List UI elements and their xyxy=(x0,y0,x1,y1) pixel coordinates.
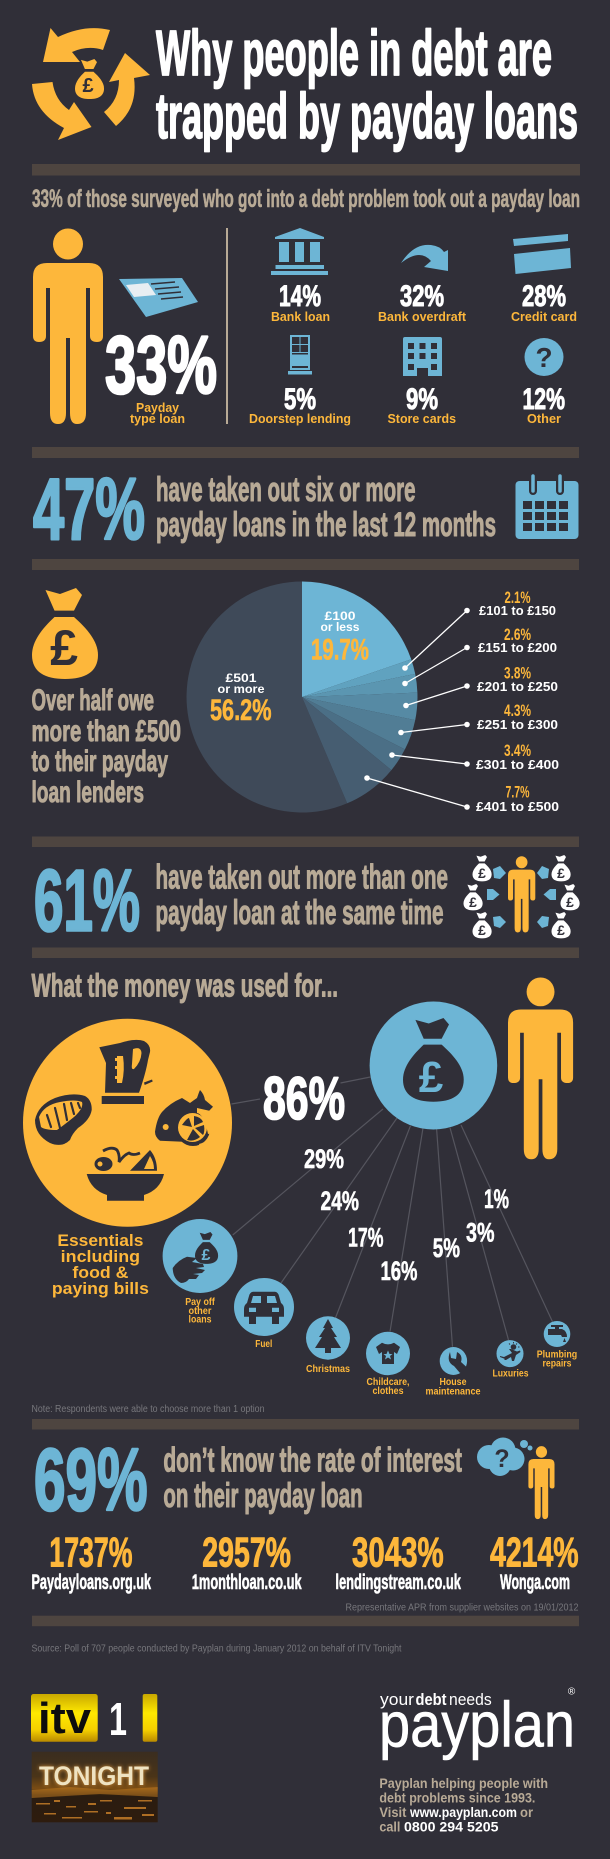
icon: question mark xyxy=(524,338,564,376)
text: payplan contact xyxy=(379,1775,548,1835)
icon: person surrounded by money bags: £ xyxy=(557,922,565,938)
text: payplan contact: debt problems since 1993. xyxy=(379,1790,535,1806)
labels: amount bands: 3.8% xyxy=(504,664,531,682)
item: pay off other loans: £ xyxy=(202,1247,211,1264)
stat: other: Other xyxy=(527,411,561,426)
leader lines xyxy=(364,608,470,810)
logo: Tonight xyxy=(32,1752,158,1822)
label: £100 or less: £100 xyxy=(324,609,356,623)
interest rates xyxy=(32,1529,579,1594)
logo: Tonight: TONIGHT xyxy=(39,1761,149,1791)
header xyxy=(32,17,578,152)
label: payday type loan: type loan xyxy=(130,412,185,426)
stat: other: 12% xyxy=(522,383,565,416)
stat: bank overdraft: 32% xyxy=(400,280,444,313)
text: over half owe: more than £500 xyxy=(32,715,181,748)
icon: person surrounded by money bags: £ xyxy=(566,894,574,910)
stat: bank loan: 14% xyxy=(279,280,321,313)
stat: 86%: 86% xyxy=(263,1065,345,1132)
stat: 33%: 33% xyxy=(105,320,217,411)
icon: person surrounded by money bags: £ xyxy=(469,894,477,910)
panel: payday type loan xyxy=(33,228,217,426)
icon: person surrounded by money bags xyxy=(464,855,580,938)
labels: amount bands: £251 to £300 xyxy=(477,718,558,732)
item: pay off other loans: Pay off xyxy=(185,1297,215,1308)
note: representative APR: Representative APR from supplier websites on 19/01/2012 xyxy=(346,1602,579,1614)
item: christmas xyxy=(306,1316,350,1375)
stat: bank loan xyxy=(271,280,330,324)
text: payplan contact: www.payplan.com xyxy=(409,1804,517,1820)
stat: doorstep lending: Doorstep lending xyxy=(249,411,351,426)
rate: paydayloans xyxy=(32,1529,151,1594)
item: christmas: Christmas xyxy=(306,1364,350,1375)
rate: lendingstream xyxy=(335,1529,461,1594)
panel: other debt types xyxy=(249,228,577,426)
logo: Payplan: payplan xyxy=(379,1689,575,1761)
text: essentials: paying bills xyxy=(52,1279,149,1298)
panel: 69% xyxy=(34,1430,555,1529)
text: payplan contact: Visit xyxy=(379,1804,407,1820)
icon: money bag: £ xyxy=(50,620,78,676)
logo: Tonight: TONIGHT xyxy=(39,1761,149,1791)
item: house maintenance: House xyxy=(440,1377,467,1388)
item: childcare, clothes: Childcare, xyxy=(366,1377,410,1388)
icon: store building xyxy=(403,337,442,376)
source: Source: Poll of 707 people conducted by Payplan during January 2012 on behalf of ITV Tonight xyxy=(32,1643,402,1655)
icon: person xyxy=(508,977,573,1159)
labels: amount bands: 2.6% xyxy=(504,626,531,644)
stat: credit card: Credit card xyxy=(511,309,577,324)
icon: money bag xyxy=(32,588,98,679)
money bag circle xyxy=(370,1002,497,1130)
icon: person xyxy=(33,228,103,424)
stat: 69%: 69% xyxy=(34,1430,148,1529)
text: essentials: food & xyxy=(72,1263,128,1282)
rate: 1monthloan xyxy=(192,1529,302,1594)
item: pay off other loans: loans xyxy=(188,1315,212,1326)
label: £501 or more xyxy=(210,671,272,727)
text: payplan contact: or xyxy=(520,1804,534,1820)
stat: store cards: Store cards xyxy=(388,411,456,426)
icon: person surrounded by money bags: £ xyxy=(557,865,565,881)
labels: amount bands xyxy=(476,589,559,814)
icon: steak xyxy=(35,1094,92,1145)
stat: bank overdraft xyxy=(378,280,467,324)
text: essentials xyxy=(52,1231,149,1298)
item: luxuries: Luxuries xyxy=(492,1369,529,1380)
percentages xyxy=(304,1144,509,1286)
item: fuel xyxy=(234,1278,294,1350)
item: plumbing repairs: repairs xyxy=(542,1359,572,1370)
text: rate of interest: on their payday loan xyxy=(163,1477,363,1515)
icon: salad bowl xyxy=(87,1148,164,1201)
panel: money use xyxy=(23,977,577,1397)
icon: confused person: ? xyxy=(494,1445,510,1473)
label: payday type loan xyxy=(130,401,185,426)
text: over half owe: to their payday xyxy=(32,745,168,778)
panel: 61% xyxy=(34,852,580,950)
labels: amount bands: £201 to £250 xyxy=(477,680,558,694)
icon: overdraft arrow xyxy=(401,245,448,271)
stat: bank overdraft: Bank overdraft xyxy=(378,309,467,324)
icon: confused person xyxy=(477,1438,555,1519)
stat: 47%: 47% xyxy=(33,461,145,558)
item: fuel: Fuel xyxy=(255,1339,272,1350)
text: six or more payday loans: have taken out six or more xyxy=(156,471,416,509)
icon: payday loan card xyxy=(119,278,198,317)
percentages: 29% xyxy=(304,1144,344,1174)
note: Note: Respondents were able to choose more than 1 option xyxy=(32,1404,264,1415)
labels: amount bands: 4.3% xyxy=(504,702,531,720)
icon: fish with lemon xyxy=(155,1090,217,1147)
panel: 47% xyxy=(33,461,578,558)
item: house maintenance: maintenance xyxy=(426,1386,481,1397)
item: pay off other loans: other xyxy=(188,1306,212,1317)
stat: credit card: 28% xyxy=(522,280,566,313)
labels: amount bands: 2.1% xyxy=(504,589,531,607)
item: childcare, clothes xyxy=(366,1332,410,1397)
logo: ITV1 xyxy=(31,1693,157,1745)
logo: Payplan: your xyxy=(380,1690,414,1709)
logo: ITV1: itv xyxy=(38,1694,92,1743)
rate: paydayloans: 1737% xyxy=(49,1529,132,1576)
item: plumbing repairs: Plumbing xyxy=(537,1350,577,1361)
icon: person surrounded by money bags: £ xyxy=(478,922,486,938)
item: plumbing repairs xyxy=(537,1321,577,1370)
panel: amounts owed xyxy=(32,582,559,814)
labels: amount bands: £401 to £500 xyxy=(476,800,559,814)
pie chart xyxy=(187,582,559,814)
percentages: 17% xyxy=(348,1222,384,1252)
rate: lendingstream: lendingstream.co.uk xyxy=(335,1571,461,1594)
text: essentials: including xyxy=(61,1247,140,1266)
connector lines xyxy=(232,1077,552,1347)
labels: amount bands: 7.7% xyxy=(506,784,530,802)
labels: amount bands: £151 to £200 xyxy=(478,641,557,655)
text: essentials: Essentials xyxy=(57,1231,143,1250)
percentages: 16% xyxy=(380,1256,418,1286)
rate: 1monthloan: 1monthloan.co.uk xyxy=(192,1571,302,1594)
labels: amount bands: £301 to £400 xyxy=(476,758,559,772)
icon: bank xyxy=(271,228,328,275)
labels: amount bands: £101 to £150 xyxy=(479,604,556,618)
money bag circle: £ xyxy=(419,1053,444,1102)
item: pay off other loans xyxy=(163,1219,237,1326)
percentages: 24% xyxy=(320,1186,359,1216)
essentials circle xyxy=(23,1019,232,1298)
text: payplan contact: 0800 294 5205 xyxy=(404,1819,499,1835)
label: £501 or more: 56.2% xyxy=(210,694,272,727)
logo: Payplan: ® xyxy=(568,1686,576,1698)
text: over half owe xyxy=(32,684,181,809)
logo: Payplan: needs xyxy=(449,1690,492,1709)
text: rate of interest xyxy=(163,1442,462,1515)
text: six or more payday loans xyxy=(156,471,496,544)
title xyxy=(156,17,578,152)
heading: what the money was used for: What the money was used for... xyxy=(32,968,338,1004)
text: over half owe: loan lenders xyxy=(32,776,144,809)
text: more than one loan xyxy=(156,858,448,932)
icon: kettle xyxy=(99,1040,153,1104)
label: £100 or less xyxy=(311,609,369,666)
percentages: 1% xyxy=(484,1184,509,1214)
item: childcare, clothes: clothes xyxy=(372,1386,404,1397)
percentages: 3% xyxy=(466,1218,494,1248)
rate: 1monthloan: 2957% xyxy=(202,1529,291,1576)
item: luxuries xyxy=(492,1340,529,1380)
text: payplan contact: Payplan helping people with xyxy=(379,1775,548,1791)
logo: ITV1: 1 xyxy=(109,1693,127,1745)
stat: doorstep lending xyxy=(249,383,351,426)
rate: lendingstream: 3043% xyxy=(352,1529,444,1576)
label: payday type loan: Payday xyxy=(136,401,179,415)
icon: debt cycle arrows with money bag: £ xyxy=(82,75,94,97)
labels: amount bands: 3.4% xyxy=(504,742,531,760)
icon: credit card xyxy=(513,234,571,274)
text: payplan contact: call xyxy=(379,1819,400,1835)
stat: bank loan: Bank loan xyxy=(271,309,330,324)
label: £100 or less: 19.7% xyxy=(311,634,369,666)
icon: debt cycle arrows with money bag xyxy=(32,28,150,140)
icon: person surrounded by money bags: £ xyxy=(478,865,486,881)
stat: credit card xyxy=(511,280,577,324)
stat: doorstep lending: 5% xyxy=(284,383,316,416)
stat: other xyxy=(522,383,565,426)
icon: calendar xyxy=(516,476,578,539)
label: £100 or less: or less xyxy=(320,620,360,634)
icon: question mark: ? xyxy=(535,342,553,373)
stat: store cards xyxy=(388,383,456,426)
rate: paydayloans: Paydayloans.org.uk xyxy=(32,1571,151,1594)
item: house maintenance xyxy=(426,1347,481,1397)
text: over half owe: Over half owe xyxy=(32,684,154,717)
stat: 61%: 61% xyxy=(34,852,140,950)
label: £501 or more: or more xyxy=(218,682,265,696)
label: £501 or more: £501 xyxy=(226,671,257,685)
percentages: 5% xyxy=(433,1233,460,1263)
rate: wonga xyxy=(490,1529,579,1594)
stat: store cards: 9% xyxy=(406,383,438,416)
logo: Payplan: debt xyxy=(416,1690,447,1709)
icon: door xyxy=(288,335,312,374)
